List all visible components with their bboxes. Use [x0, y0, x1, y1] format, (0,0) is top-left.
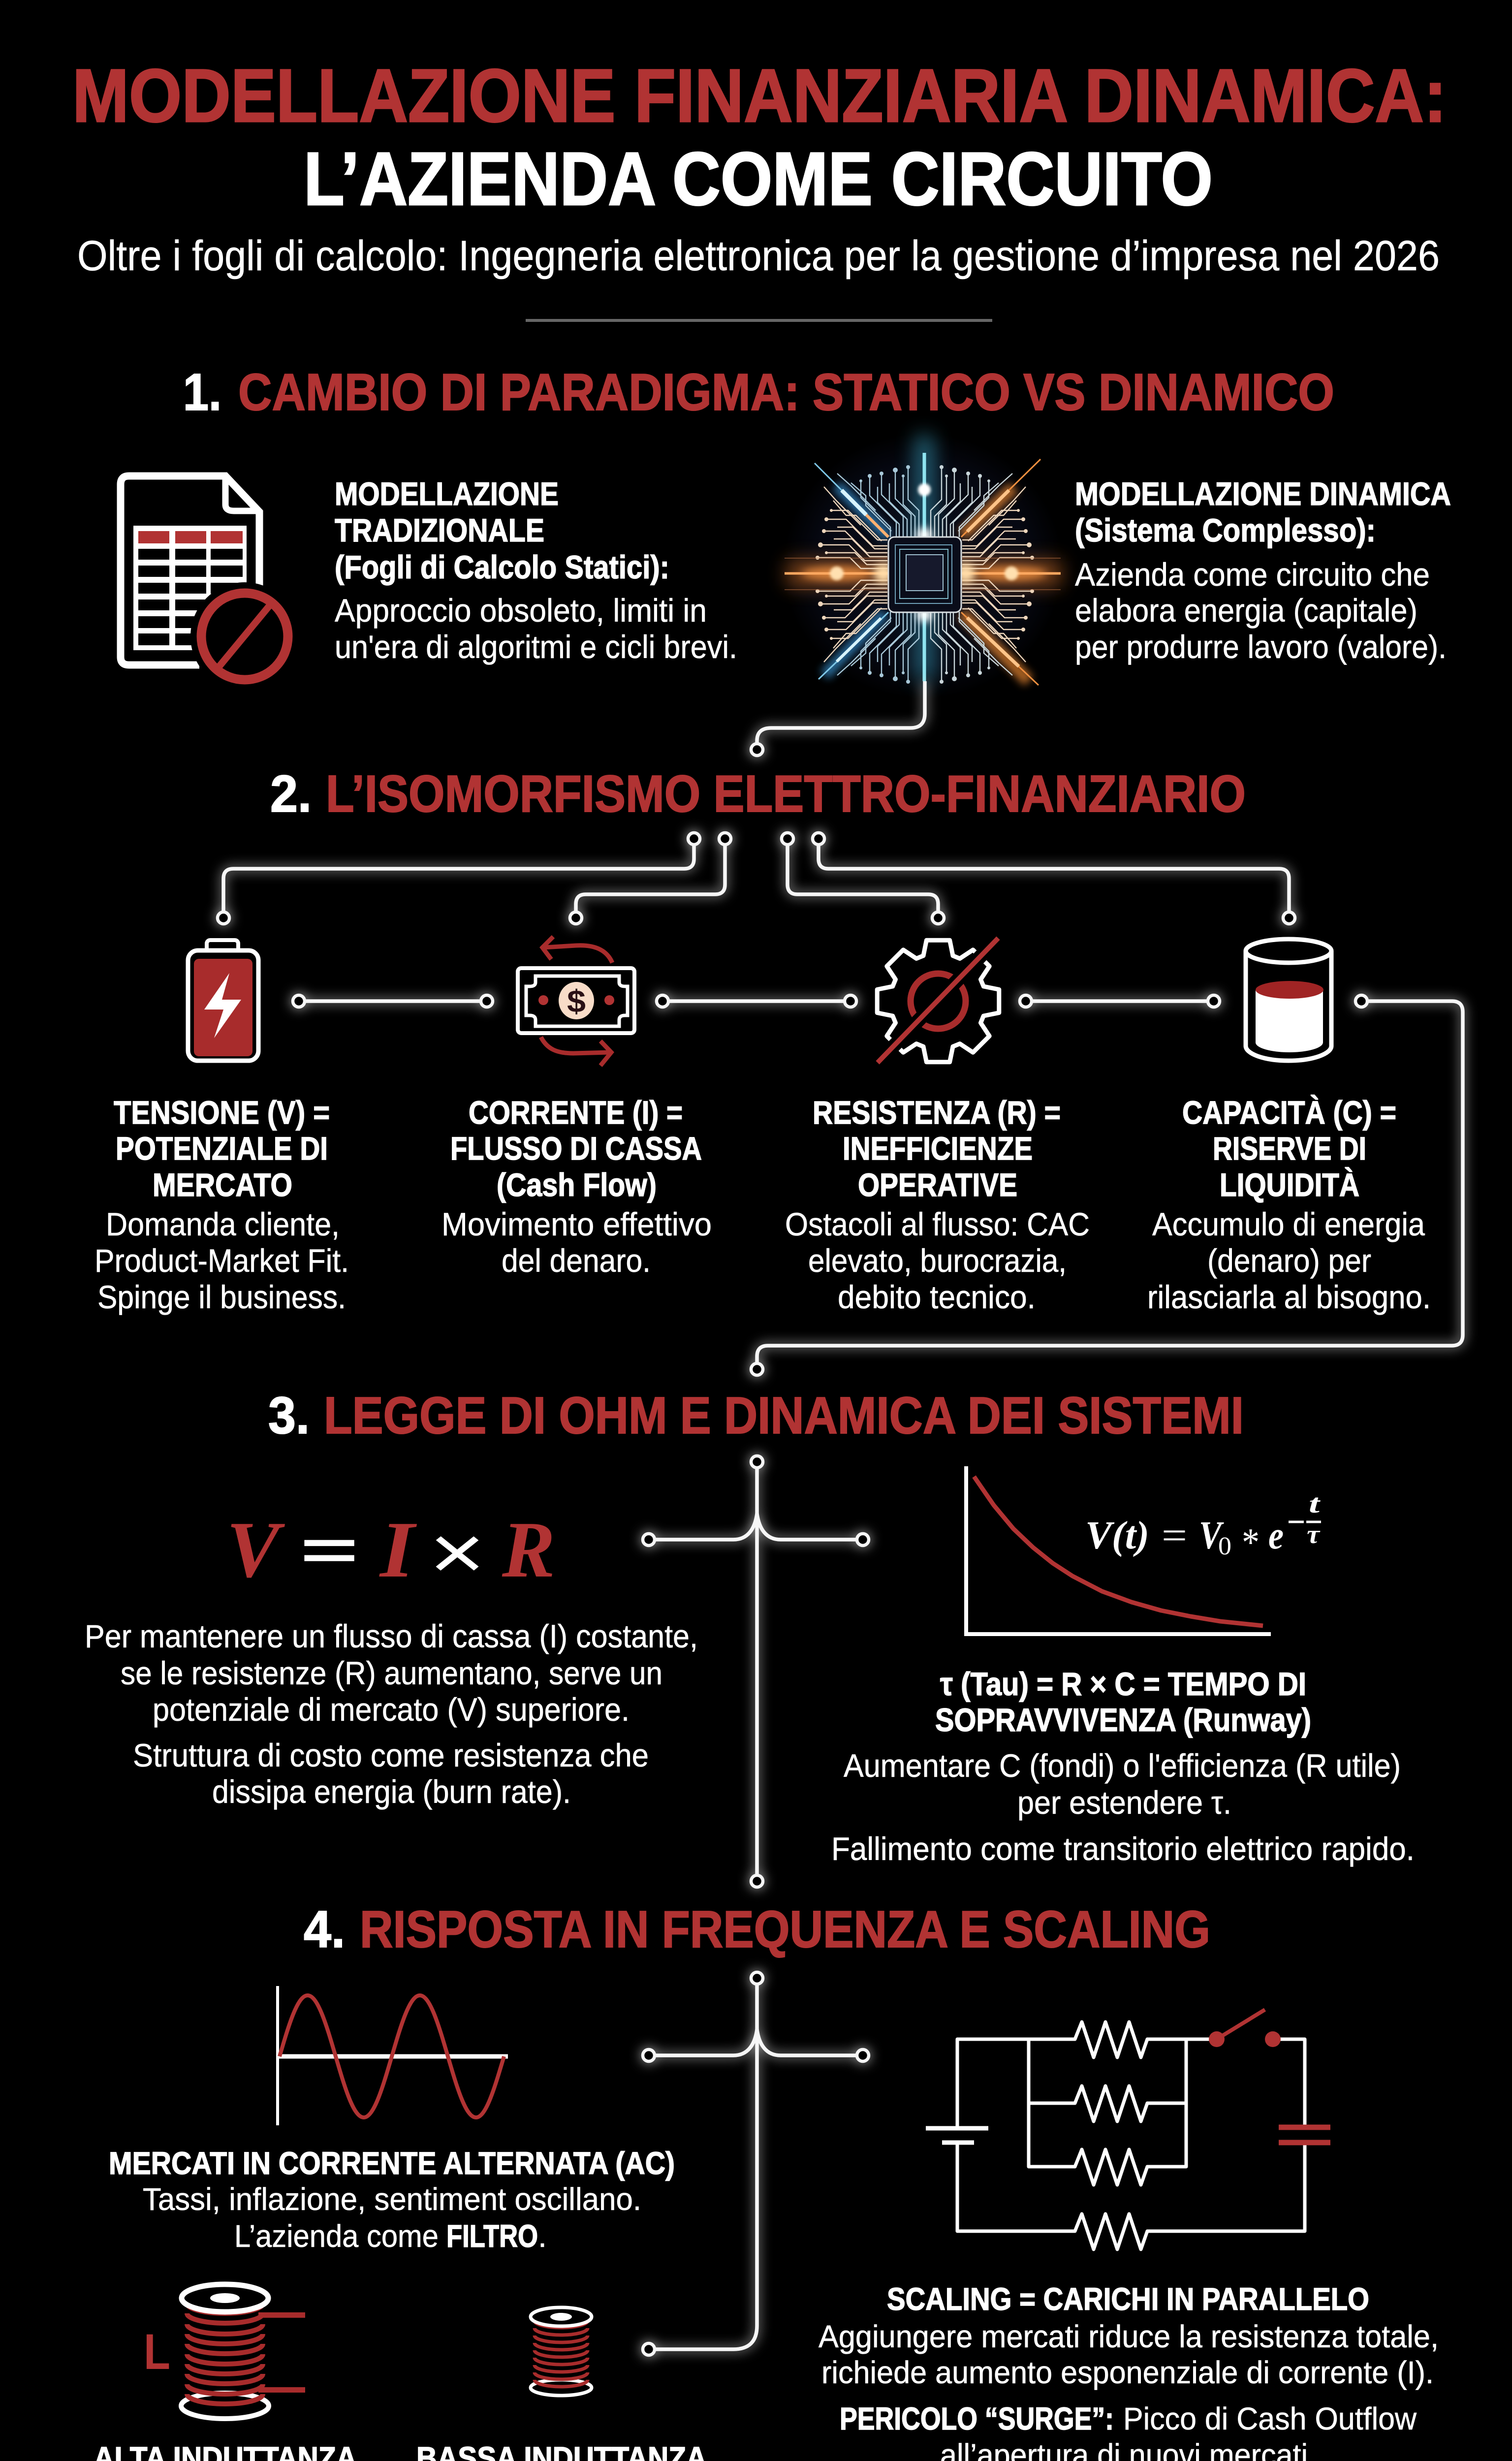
text: scaling explanation: Picco di Cash Outflow — [1123, 2401, 1417, 2436]
wire: gear to capacitor — [1032, 999, 1208, 1003]
text: traditional modelling: un'era di algoritmi e cicli brevi. — [335, 629, 737, 665]
heading: section 1: 1. — [183, 363, 221, 421]
text: scaling explanation: Aggiungere mercati riduce la resistenza totale, — [819, 2319, 1439, 2354]
wire: to battery — [223, 845, 694, 912]
text: resistance: RESISTENZA (R) = — [813, 1094, 1061, 1131]
wire: section 3 trunk — [755, 1468, 759, 1875]
heading: section 3: LEGGE DI OHM E DINAMICA DEI SISTEMI — [324, 1387, 1244, 1445]
flares — [788, 436, 1061, 681]
heading: section 4: 4. — [304, 1900, 345, 1958]
icon: battery — [188, 940, 258, 1061]
formula: V = I x R: I — [379, 1506, 417, 1594]
text: runway — [831, 1666, 1415, 1867]
text: voltage: Product-Market Fit. — [94, 1242, 349, 1279]
text: capacitance: LIQUIDITÀ — [1220, 1167, 1359, 1203]
text: capacitance: Accumulo di energia — [1152, 1206, 1425, 1242]
text: voltage: POTENZIALE DI — [116, 1130, 328, 1167]
heading: section 3: 3. — [268, 1387, 310, 1445]
text: resistance: debito tecnico. — [838, 1279, 1036, 1315]
text: resistance: Ostacoli al flusso: CAC — [785, 1206, 1090, 1242]
panel text: dynamic modelling: Azienda come circuito che — [1075, 556, 1430, 593]
text: scaling explanation — [819, 2281, 1439, 2461]
formula: V = I x R: R — [502, 1506, 555, 1594]
text: Ohm's law explanation: Per mantenere un flusso di cassa (I) costante, — [85, 1618, 698, 1654]
text: Ohm's law explanation: potenziale di mercato (V) superiore. — [153, 1691, 630, 1728]
icon: banknote with flow arrows — [518, 937, 634, 1066]
text: scaling explanation: PERICOLO “SURGE”: — [840, 2401, 1114, 2436]
panel text: dynamic modelling: elabora energia (capitale) — [1075, 592, 1418, 629]
formula: V(t): τ — [1307, 1519, 1321, 1549]
heading: section 4: RISPOSTA IN FREQUENZA E SCALING — [360, 1900, 1210, 1958]
panel: current — [441, 937, 712, 1279]
formula: V(t): V — [1199, 1514, 1224, 1557]
panel: low inductance — [412, 2307, 709, 2461]
heading: section 1: CAMBIO DI PARADIGMA: STATICO VS DINAMICO — [238, 363, 1334, 421]
text: AC markets: FILTRO — [446, 2218, 538, 2254]
text: AC markets — [109, 2145, 675, 2254]
formula: V = I x R: = — [300, 1519, 358, 1581]
panel: resistance — [785, 938, 1090, 1315]
panel: high inductance — [75, 2284, 376, 2461]
traces — [816, 465, 1034, 684]
panel text: dynamic modelling: MODELLAZIONE DINAMICA — [1075, 475, 1451, 512]
title — [72, 54, 1447, 221]
text: current: (Cash Flow) — [497, 1167, 657, 1203]
chip body — [888, 537, 961, 612]
text: Ohm's law explanation: se le resistenze (R) aumentano, serve un — [121, 1655, 662, 1691]
text: Ohm's law explanation: Struttura di costo come resistenza che — [133, 1737, 649, 1773]
formula: V = I x R — [226, 1506, 555, 1596]
panel: scaling — [819, 2010, 1439, 2461]
text: current: del denaro. — [502, 1242, 651, 1279]
formula: V(t): = — [1162, 1514, 1187, 1557]
text: Ohm's law explanation: dissipa energia (burn rate). — [212, 1773, 571, 1810]
text: capacitance: (denaro) per — [1207, 1242, 1371, 1279]
text: voltage: Domanda cliente, — [106, 1206, 340, 1242]
text: Ohm's law explanation — [85, 1618, 698, 1810]
text: current: CORRENTE (I) = — [469, 1094, 683, 1131]
text: scaling explanation: richiede aumento esponenziale di corrente (I). — [821, 2355, 1434, 2390]
text: traditional modelling: Approccio obsoleto, limiti in — [335, 592, 707, 629]
text: runway: per estendere τ. — [1017, 1784, 1231, 1821]
text: runway: SOPRAVVIVENZA (Runway) — [935, 1702, 1311, 1738]
text: traditional modelling: MODELLAZIONE — [335, 475, 559, 512]
panel: system dynamics — [831, 1466, 1415, 1867]
bright beams — [785, 453, 1061, 685]
text: AC markets: L’azienda come — [234, 2218, 439, 2254]
text: AC markets: MERCATI IN CORRENTE ALTERNATA (AC) — [109, 2145, 675, 2181]
text: capacitance: rilasciarla al bisogno. — [1147, 1279, 1431, 1315]
wire: battery to money — [305, 999, 481, 1003]
text: runway: Fallimento come transitorio elettrico rapido. — [831, 1830, 1415, 1867]
icon: small coil — [531, 2307, 592, 2396]
text: voltage: Spinge il business. — [97, 1279, 346, 1315]
circuit wires and nodes — [218, 681, 1463, 2355]
text: capacitance — [1147, 1094, 1431, 1315]
wire: section 4 left branch — [655, 2029, 757, 2055]
panel: Ohm's law — [85, 1506, 698, 1810]
formula: V(t) — [1085, 1489, 1321, 1564]
icon: crossed gear — [877, 938, 999, 1063]
text: resistance — [785, 1094, 1090, 1315]
wire: capacitor to section 3 — [757, 1001, 1463, 1363]
icon: large coil: L — [144, 2324, 170, 2380]
wire: section 3 left branch — [655, 1514, 757, 1540]
formula: V(t): V(t) — [1085, 1514, 1149, 1557]
text: resistance: elevato, burocrazia, — [808, 1242, 1067, 1279]
icon: banknote with flow arrows: $ — [567, 983, 586, 1019]
text: AC markets: Tassi, inflazione, sentiment oscillano. — [143, 2181, 641, 2217]
text: voltage — [94, 1094, 349, 1315]
icon: large coil — [144, 2284, 305, 2419]
text: runway: Aumentare C (fondi) o l'efficienza (R utile) — [844, 1747, 1401, 1784]
chart: exponential decay — [966, 1466, 1271, 1634]
panel: alternating current markets — [109, 1986, 675, 2254]
text: voltage: MERCATO — [153, 1167, 292, 1203]
wire: to money — [576, 845, 725, 912]
panel text: dynamic modelling — [1075, 475, 1451, 665]
heading: section 2: L’ISOMORFISMO ELETTRO-FINANZIARIO — [326, 765, 1246, 823]
formula: V = I x R: V — [226, 1506, 285, 1594]
connection nodes — [218, 744, 1367, 2355]
text: traditional modelling: (Fogli di Calcolo Statici): — [335, 549, 669, 585]
formula: V(t): * — [1242, 1521, 1260, 1564]
wire: section 4 trunk and coil branch — [655, 1984, 757, 2349]
formula: V(t): t — [1309, 1489, 1321, 1518]
text: resistance: INEFFICIENZE — [843, 1130, 1033, 1167]
text: traditional modelling — [335, 475, 737, 665]
panel text: dynamic modelling: per produrre lavoro (valore). — [1075, 629, 1447, 665]
text: voltage: TENSIONE (V) = — [114, 1094, 330, 1131]
formula: V = I x R: × — [429, 1510, 485, 1596]
heading: section 2: 2. — [270, 765, 312, 823]
formula: V(t): 0 — [1218, 1532, 1231, 1560]
title: L’AZIENDA COME CIRCUITO — [304, 137, 1213, 221]
text: current: Movimento effettivo — [441, 1206, 712, 1242]
panel: capacitance — [1147, 939, 1431, 1315]
panel text: dynamic modelling: (Sistema Complesso): — [1075, 512, 1376, 548]
diagram: parallel load circuit — [926, 2010, 1330, 2249]
wire: section 3 right branch — [757, 1514, 857, 1540]
text: runway: τ (Tau) = R × C = TEMPO DI — [940, 1666, 1306, 1702]
formula: V(t): e — [1268, 1514, 1284, 1557]
wire: section 4 right branch — [757, 2029, 857, 2055]
text: traditional modelling: TRADIZIONALE — [335, 512, 544, 548]
text: current: FLUSSO DI CASSA — [450, 1130, 702, 1167]
panel: traditional modelling — [121, 475, 737, 691]
panel: voltage — [94, 940, 349, 1315]
text: capacitance: CAPACITÀ (C) = — [1182, 1094, 1396, 1131]
text: resistance: OPERATIVE — [858, 1167, 1017, 1203]
icon: spreadsheet with prohibition sign — [121, 476, 299, 691]
text: scaling explanation: SCALING = CARICHI IN PARALLELO — [887, 2281, 1369, 2317]
chart: sine wave — [278, 1986, 508, 2125]
icon: glowing microchip — [783, 433, 1063, 699]
wire: to gear — [788, 845, 938, 912]
wire: money to gear — [668, 999, 845, 1003]
text: AC markets: . — [538, 2218, 547, 2254]
text: current — [441, 1094, 712, 1279]
icon: reservoir cylinder — [1246, 939, 1331, 1061]
wire: chip to section 2 — [757, 681, 925, 744]
wire: to capacitor — [819, 845, 1289, 912]
text: capacitance: RISERVE DI — [1213, 1130, 1366, 1167]
